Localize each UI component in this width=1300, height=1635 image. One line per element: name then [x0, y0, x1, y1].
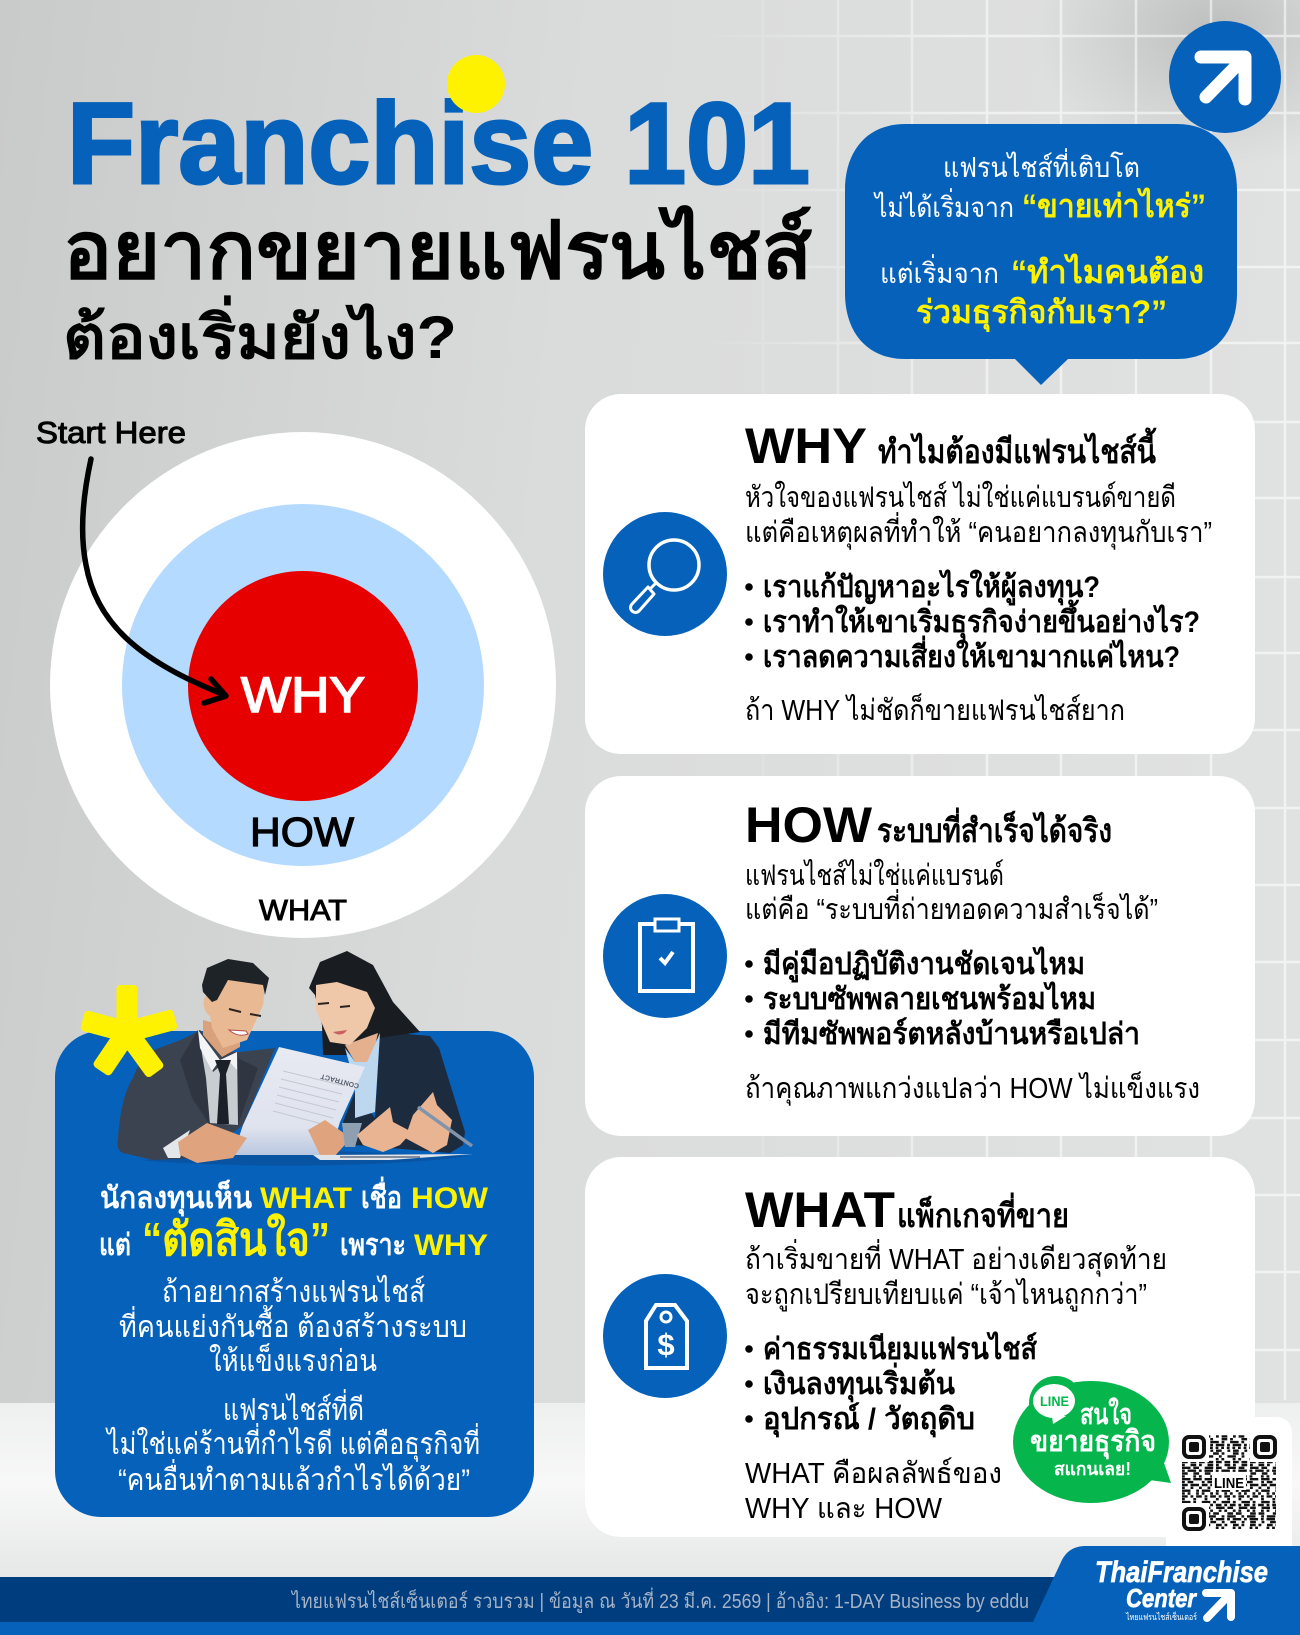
title: ต้องเริ่มยังไง? — [63, 295, 457, 371]
heading: why: ทำไมต้องมีแฟรนไชส์นี้ — [878, 427, 1157, 470]
text block: advice: แฟรนไชส์ที่ดี — [223, 1389, 364, 1427]
chart: golden circle — [50, 432, 556, 938]
callout: speech bubble: ร่วมธุรกิจกับเรา?” — [916, 294, 1167, 333]
title: อยากขยายแฟรนไชส์ — [63, 204, 812, 295]
list: why questions — [745, 569, 1200, 674]
heading: what how why: WHY — [414, 1229, 488, 1262]
list: why questions: เราทำให้เขาเริ่มธุรกิจง่ายขึ้นอย่างไร? — [763, 599, 1200, 641]
text block: how intro: แฟรนไชส์ไม่ใช่แค่แบรนด์ — [745, 858, 1004, 892]
list: why questions: เราลดความเสี่ยงให้เขามากแค่ไหน? — [763, 635, 1180, 674]
chart: golden circle: WHAT — [259, 895, 347, 927]
callout: line bubble — [1013, 1376, 1171, 1503]
heading: what: แพ็กเกจที่ขาย — [897, 1192, 1069, 1234]
text block: advice: ถ้าอยากสร้างแฟรนไชส์ — [162, 1274, 425, 1309]
text block: advice: ให้แข็งแรงก่อน — [209, 1342, 377, 1378]
callout: line bubble: ขยายธุรกิจ — [1030, 1426, 1156, 1459]
icon: magnifier — [603, 512, 727, 636]
heading: what how why — [99, 1176, 489, 1265]
list: what items: ค่าธรรมเนียมแฟรนไชส์ — [763, 1331, 1038, 1366]
title: Franchise 101 — [67, 80, 810, 208]
callout: line bubble: สแกนเลย! — [1054, 1459, 1131, 1479]
list: what items: อุปกรณ์ / วัตถุดิบ — [763, 1402, 975, 1438]
callout: speech bubble: ไม่ได้เริ่มจาก — [873, 188, 1014, 223]
icon: yellow dot — [447, 55, 505, 113]
heading: how — [745, 797, 1112, 853]
heading: what how why: นักลงทุนเห็น — [100, 1179, 252, 1217]
text block: advice: ไม่ใช่แค่ร้านที่กำไรดี แต่คือธุรกิจที่ — [105, 1423, 480, 1463]
heading: what how why: WHAT — [260, 1182, 352, 1215]
text block: what note: WHAT คือผลลัพธ์ของ — [745, 1457, 1002, 1490]
text block: how intro — [745, 858, 1158, 926]
logo: thai franchise center: ThaiFranchise — [1095, 1556, 1268, 1589]
text block: what intro — [745, 1239, 1167, 1312]
list: what items — [745, 1331, 1038, 1438]
image: business people reading a contract — [118, 951, 473, 1166]
callout: speech bubble — [845, 124, 1237, 385]
list: how questions: ระบบซัพพลายเชนพร้อมไหม — [763, 981, 1096, 1016]
text block: what intro: จะถูกเปรียบเทียบแค่ “เจ้าไหนถูกกว่า” — [745, 1277, 1147, 1312]
heading: how: ระบบที่สำเร็จได้จริง — [877, 807, 1112, 849]
text block: how intro: แต่คือ “ระบบที่ถ่ายทอดความสำเร็จได้” — [745, 889, 1158, 926]
icon: line logo: LINE — [1040, 1393, 1069, 1409]
text block: what note: WHY และ HOW — [745, 1493, 943, 1525]
icon: price tag: $ — [657, 1327, 675, 1362]
heading: what how why: เชื่อ — [361, 1176, 402, 1215]
list: why questions: เราแก้ปัญหาอะไรให้ผู้ลงทุน? — [763, 569, 1100, 606]
heading: what: WHAT — [745, 1182, 895, 1238]
text block: advice: “คนอื่นทำตามแล้วกำไรได้ด้วย” — [118, 1459, 470, 1497]
heading: what how why: แต่ — [99, 1229, 131, 1262]
callout: speech bubble: “ทำไมคนต้อง — [1011, 253, 1204, 290]
image: business people reading a contract: CONTRACT — [320, 1072, 360, 1089]
panel: what — [585, 1157, 1255, 1537]
text block: why intro — [745, 480, 1212, 550]
callout: line bubble: สนใจ — [1080, 1397, 1132, 1431]
arrow: start here to why — [83, 459, 226, 703]
panel: investor decision — [55, 951, 534, 1517]
icon: arrow badge — [1169, 21, 1281, 133]
icon: price tag — [603, 1274, 727, 1398]
callout: speech bubble: “ขายเท่าไหร่” — [1022, 187, 1206, 224]
logo: thai franchise center: Center — [1126, 1583, 1198, 1613]
heading: what — [745, 1182, 1069, 1238]
text block: how note: ถ้าคุณภาพแกว่งแปลว่า HOW ไม่แข็งแรง — [745, 1070, 1200, 1106]
text block: what intro: ถ้าเริ่มขายที่ WHAT อย่างเดียวสุดท้าย — [745, 1239, 1167, 1277]
list: how questions: มีคู่มือปฏิบัติงานชัดเจนไหม — [763, 946, 1085, 983]
list: how questions: มีทีมซัพพอร์ตหลังบ้านหรือเปล่า — [763, 1017, 1140, 1051]
callout: speech bubble: แฟรนไชส์ที่เติบโต — [943, 148, 1140, 183]
callout: speech bubble: แต่เริ่มจาก — [880, 254, 999, 289]
text block: why intro: แต่คือเหตุผลที่ทำให้ “คนอยากลงทุนกับเรา” — [745, 512, 1212, 550]
text block: why note: ถ้า WHY ไม่ชัดก็ขายแฟรนไชส์ยาก — [745, 692, 1125, 727]
panel: qr code — [1166, 1417, 1292, 1562]
panel: how — [585, 776, 1255, 1136]
chart: golden circle: WHY — [241, 667, 365, 723]
text block: why intro: หัวใจของแฟรนไชส์ ไม่ใช่แค่แบรนด์ขายดี — [745, 480, 1176, 514]
label: start here: Start Here — [36, 415, 186, 450]
text block: what note — [745, 1457, 1002, 1525]
chart: golden circle: HOW — [250, 809, 354, 855]
list: how questions — [745, 946, 1140, 1051]
icon: line logo — [1033, 1384, 1075, 1424]
panel: why — [585, 394, 1255, 754]
heading: how: HOW — [745, 797, 873, 853]
heading: why — [745, 418, 1157, 474]
panel: qr code: LINE — [1214, 1475, 1244, 1492]
text block: advice — [105, 1274, 480, 1497]
icon: yellow asterisk — [80, 985, 178, 1079]
text block: advice: ที่คนแย่งกันซื้อ ต้องสร้างระบบ — [119, 1305, 467, 1344]
footer bar: ไทยแฟรนไชส์เซ็นเตอร์ รวบรวม | ข้อมูล ณ วันที่ 23 มี.ค. 2569 | อ้างอิง: 1-DAY Business by eddu — [290, 1587, 1029, 1614]
heading: what how why: “ตัดสินใจ” — [142, 1212, 330, 1265]
footer bar — [0, 1577, 1300, 1635]
logo: thai franchise center: ไทยแฟรนไชส์เซ็นเตอร์ — [1125, 1610, 1197, 1622]
icon: clipboard — [603, 894, 727, 1018]
list: what items: เงินลงทุนเริ่มต้น — [763, 1362, 955, 1403]
heading: what how why: HOW — [411, 1182, 489, 1215]
title — [63, 80, 812, 371]
heading: why: WHY — [745, 418, 867, 474]
logo: thai franchise center — [1033, 1546, 1300, 1635]
heading: what how why: เพราะ — [340, 1229, 406, 1262]
